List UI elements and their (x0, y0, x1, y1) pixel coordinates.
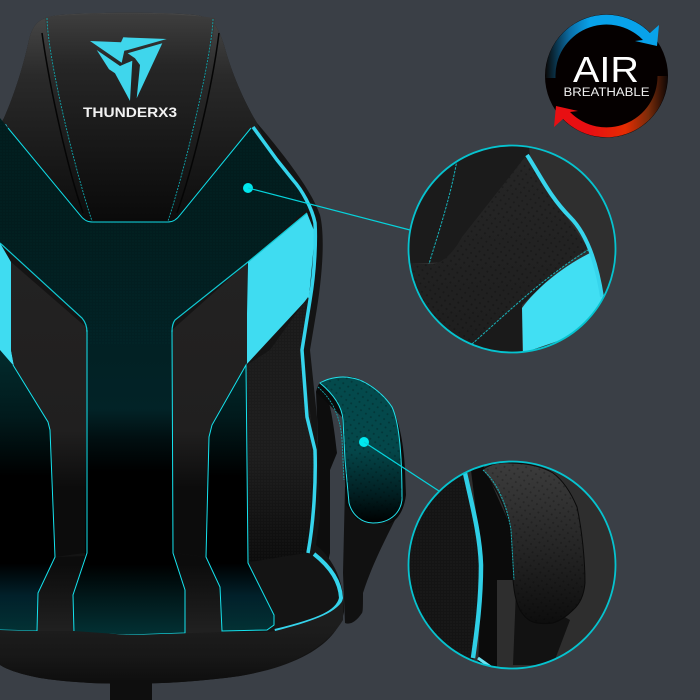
leader line: armrest (364, 442, 439, 491)
armrest frame (314, 387, 337, 605)
teal upper Y panel (0, 118, 308, 360)
cyan side panel right (246, 213, 315, 365)
icon: red arrow (554, 76, 668, 137)
inset piping (527, 155, 602, 297)
inset piping (465, 473, 481, 658)
logo (83, 37, 178, 120)
headrest (0, 13, 262, 222)
inset black lower panel (473, 272, 556, 352)
inset arm support (513, 600, 570, 665)
inset cyan patch (522, 253, 603, 353)
centre column (73, 345, 185, 634)
cyan piping top left (0, 124, 9, 140)
logo wordmark: THUNDERX3 (83, 105, 178, 120)
lower side panel left (0, 350, 55, 631)
inset headrest (410, 146, 530, 264)
armrest support (343, 487, 396, 624)
back piping right (253, 127, 315, 553)
lower side panel right (206, 365, 274, 631)
detail circle: back mesh (400, 140, 620, 360)
detail circle: armrest (405, 460, 620, 670)
chair (0, 13, 406, 700)
badge subtitle: BREATHABLE (564, 87, 650, 99)
leader line: upper back (248, 188, 410, 230)
badge disc (545, 14, 668, 138)
seat piping (275, 554, 341, 631)
black middle panels (172, 263, 247, 557)
inset armrest pad (482, 463, 585, 624)
stitching (47, 18, 213, 221)
logo mark (90, 37, 167, 101)
badge: AIR breathable (545, 14, 668, 138)
icon: blue arrow (545, 15, 659, 78)
back and seat body (0, 13, 344, 684)
marker dot: armrest (359, 437, 369, 447)
cyan side panel left (0, 243, 14, 366)
armrest pad (316, 377, 406, 525)
inset perforated panel (405, 157, 588, 345)
badge title: AIR (573, 49, 639, 90)
mesh panel right (247, 297, 315, 562)
inset frame (470, 462, 513, 668)
seat front (0, 600, 343, 684)
marker dot: upper back (243, 183, 253, 193)
inset mesh panel (410, 475, 479, 660)
centre column outline (73, 330, 185, 635)
gas lift column (110, 680, 152, 700)
